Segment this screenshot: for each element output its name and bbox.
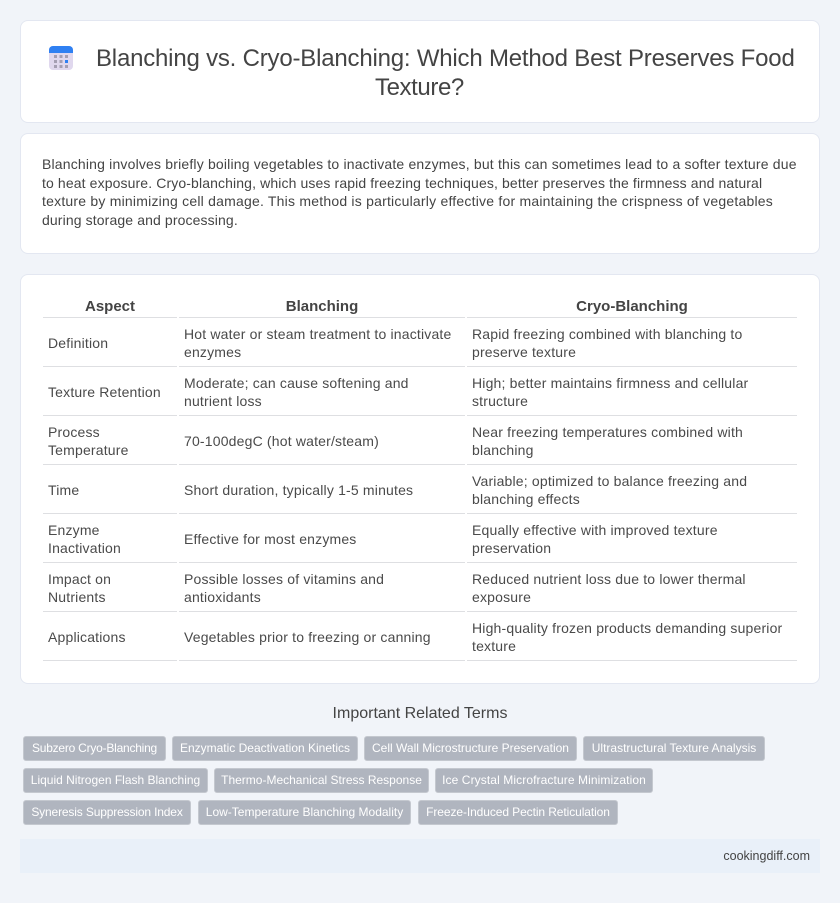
row: Texture Retention: High; better maintains firmness and cellular (472, 375, 748, 391)
row: Enzyme Inactivation (48, 522, 718, 556)
intro line 2: to heat exposure. Cryo-blanching, which uses rapid freezing techniques, better preserves the firmness and natural (42, 175, 762, 191)
row: Process Temperature: Process (48, 424, 100, 440)
tag (23, 736, 166, 761)
tag: Freeze-Induced Pectin Reticulation (426, 805, 610, 819)
row: Definition: enzymes (184, 344, 241, 360)
row: Applications: High-quality frozen products demanding superior (472, 620, 782, 636)
heading: related terms: Important Related Terms (333, 705, 507, 722)
row: Texture Retention: Moderate; can cause softening and (184, 375, 409, 391)
tag: Subzero Cryo-Blanching (32, 741, 157, 755)
table header: Aspect: Aspect (85, 298, 135, 315)
intro line 3: texture by minimizing cell damage. This method is particularly effective for maintaining the crispness of vegetables (42, 193, 773, 209)
footer (20, 839, 820, 873)
intro line 4: during storage and processing. (42, 212, 238, 228)
row: Enzyme Inactivation: Effective for most enzymes (184, 531, 356, 547)
tag: Low-Temperature Blanching Modality (206, 805, 403, 819)
row: Process Temperature: Near freezing temperatures combined with (472, 424, 743, 440)
tag: Cell Wall Microstructure Preservation (372, 741, 569, 755)
row: Time: blanching effects (472, 491, 580, 507)
row: Time: Time (48, 482, 79, 498)
row: Time: Variable; optimized to balance freezing and (472, 473, 747, 489)
row: Definition: Rapid freezing combined with blanching to (472, 326, 742, 342)
row: Process Temperature: blanching (472, 442, 534, 458)
tag: Ice Crystal Microfracture Minimization (442, 773, 646, 787)
row: Impact on Nutrients: antioxidants (184, 589, 261, 605)
tag: Ultrastructural Texture Analysis (592, 741, 756, 755)
tag (172, 736, 358, 761)
panel: comparison table (20, 274, 820, 684)
table header: Blanching: Blanching (286, 298, 358, 315)
footer source: cookingdiff.com (723, 849, 810, 863)
tag (364, 736, 577, 761)
tag: Enzymatic Deactivation Kinetics (180, 741, 350, 755)
tag (435, 768, 653, 793)
row: Definition: Definition (48, 335, 108, 351)
row: Impact on Nutrients: Nutrients (48, 589, 106, 605)
row: Impact on Nutrients: Impact on (48, 571, 111, 587)
row: Impact on Nutrients (48, 571, 746, 605)
tag: Liquid Nitrogen Flash Blanching (31, 773, 200, 787)
row: Texture Retention: nutrient loss (184, 393, 262, 409)
row: Applications: Vegetables prior to freezing or canning (184, 629, 431, 645)
row: Enzyme Inactivation: Inactivation (48, 540, 121, 556)
row: Applications: texture (472, 638, 516, 654)
tag (23, 800, 191, 825)
row: Definition: preserve texture (472, 344, 576, 360)
intro line 1: Blanching involves briefly boiling vegetables to inactivate enzymes, but this can sometimes lead to a softer texture due (42, 156, 797, 172)
row: Applications: Applications (48, 629, 126, 645)
tag: Thermo-Mechanical Stress Response (221, 773, 422, 787)
panel: related term tags (23, 736, 765, 825)
table header: Cryo-Blanching: Cryo-Blanching (576, 298, 688, 315)
row: Definition (48, 326, 742, 360)
row: Impact on Nutrients: exposure (472, 589, 531, 605)
row: Applications (48, 620, 782, 654)
row: Texture Retention: Texture Retention (48, 384, 161, 400)
tag (583, 736, 765, 761)
row: Process Temperature: Temperature (48, 442, 129, 458)
tag (198, 800, 411, 825)
icon: calendar (49, 46, 73, 70)
row: Time (48, 473, 747, 507)
row: Enzyme Inactivation: preservation (472, 540, 551, 556)
row: Process Temperature (48, 424, 743, 458)
tag (23, 768, 208, 793)
row: Definition: Hot water or steam treatment to inactivate (184, 326, 451, 342)
tag: Syneresis Suppression Index (31, 805, 183, 819)
panel: introduction (20, 133, 820, 254)
row: Impact on Nutrients: Possible losses of vitamins and (184, 571, 384, 587)
row: Process Temperature: 70-100degC (hot water/steam) (184, 433, 379, 449)
tag (214, 768, 429, 793)
row: Texture Retention (48, 375, 748, 409)
title line 2: Texture? (375, 74, 464, 101)
title line 1: Blanching vs. Cryo-Blanching: Which Method Best Preserves Food (96, 45, 795, 72)
row: Enzyme Inactivation: Enzyme (48, 522, 100, 538)
row: Time: Short duration, typically 1-5 minutes (184, 482, 413, 498)
tag (418, 800, 618, 825)
row: Impact on Nutrients: Reduced nutrient loss due to lower thermal (472, 571, 746, 587)
panel: title card (20, 20, 820, 123)
row: Enzyme Inactivation: Equally effective with improved texture (472, 522, 718, 538)
row: Texture Retention: structure (472, 393, 528, 409)
